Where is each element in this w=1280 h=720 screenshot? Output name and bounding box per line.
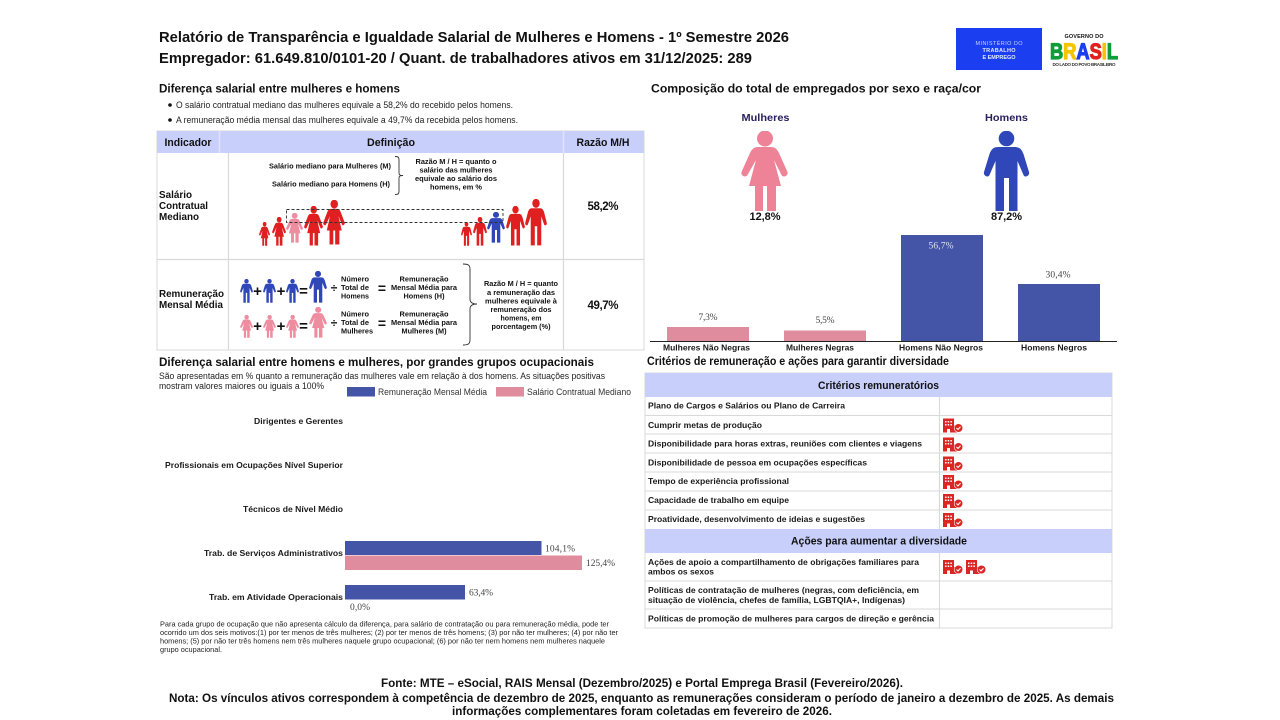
- logo: Ministério do Trabalho e Emprego: [956, 28, 1042, 70]
- median salary definition: [269, 156, 497, 194]
- occupational chart description: mostram valores maiores ou iguais a 100%: [159, 381, 324, 391]
- action rows: Políticas de contratação de mulheres (negras, com deficiência, em: [648, 585, 919, 595]
- logo: Ministério do Trabalho e Emprego: TRABALHO: [982, 48, 1016, 54]
- criteria rows: Disponibilidade de pessoa em ocupações específicas: [648, 458, 867, 468]
- panel: indicator table: [157, 131, 644, 350]
- bar chart: sex and race: [650, 235, 1117, 352]
- bar chart: occupational groups: 63,4%: [469, 588, 493, 598]
- row label: salário contratual mediano: Salário: [159, 189, 192, 201]
- logo: Governo do Brasil: BRASIL: [1050, 39, 1118, 64]
- formula: women average pay: [240, 307, 457, 338]
- bar chart: occupational groups: 0,0%: [350, 603, 370, 613]
- formula: men average pay: Homens: [341, 294, 369, 300]
- ratio value: 49,7%: 49,7%: [588, 300, 618, 312]
- average pay definition: mulheres equivale à: [485, 298, 557, 306]
- occupational chart description: São apresentadas em % quanto a remuneração das mulheres vale em relação à dos homens. As situações positivas: [159, 371, 605, 381]
- formula: men average pay: Homens (H): [404, 294, 444, 300]
- bar chart: occupational groups: Técnicos de Nível Médio: [243, 504, 343, 514]
- bullet statements: O salário contratual mediano das mulheres equivale a 58,2% do recebido pelos homens.: [176, 100, 513, 110]
- bar chart: sex and race: Mulheres Não Negras: [663, 342, 750, 352]
- formula: men average pay: Número: [341, 276, 369, 284]
- legend: [347, 387, 631, 398]
- logo: Ministério do Trabalho e Emprego: E EMPREGO: [982, 55, 1016, 61]
- section header: actions: Ações para aumentar a diversidade: [791, 536, 967, 548]
- row label: remuneração mensal média: Mensal Média: [159, 299, 223, 311]
- source and note: Fonte: MTE – eSocial, RAIS Mensal (Dezembro/2025) e Portal Emprega Brasil (Fevereiro/2026).: [381, 678, 903, 690]
- row label: remuneração mensal média: Remuneração: [159, 288, 224, 300]
- report title: Relatório de Transparência e Igualdade Salarial de Mulheres e Homens - 1º Semestre 2026: [159, 30, 789, 46]
- legend: Remuneração Mensal Média: [378, 387, 488, 398]
- bar chart: occupational groups: [165, 416, 615, 613]
- action rows: situação de violência, chefes de família, LGBTQIA+, Indígenas): [648, 595, 905, 605]
- heading: criteria and actions: Critérios de remuneração e ações para garantir diversidade: [647, 354, 949, 368]
- bar chart: sex and race: Homens Negros: [1021, 342, 1087, 352]
- average pay definition: remuneração dos: [490, 307, 552, 314]
- panel: criteria table: [645, 373, 1112, 628]
- section header: criteria: [645, 373, 1112, 397]
- ratio value: 58,2%: 58,2%: [588, 201, 618, 213]
- formula: men average pay: =: [299, 283, 308, 300]
- heading: occupational groups: Diferença salarial entre homens e mulheres, por grandes grupos ocupacionais: [159, 355, 594, 369]
- median salary definition: equivale ao salário dos: [415, 176, 497, 183]
- bar chart: sex and race: 5,5%: [816, 316, 835, 326]
- heading: wage gap: Diferença salarial entre mulheres e homens: [159, 82, 400, 96]
- formula: women average pay: Mulheres: [341, 328, 373, 336]
- bullet statements: [168, 100, 518, 125]
- table header: Indicador: [164, 137, 212, 149]
- formula: men average pay: =: [378, 280, 386, 296]
- median salary definition: Razão M / H = quanto o: [416, 159, 496, 166]
- criteria rows: Tempo de experiência profissional: [648, 476, 789, 486]
- median salary definition: Salário mediano para Mulheres (M): [269, 164, 391, 170]
- average pay definition: porcentagem (%): [492, 324, 550, 331]
- median salary definition: Salário mediano para Homens (H): [272, 182, 390, 188]
- formula: women average pay: +: [253, 318, 262, 335]
- formula: women average pay: ÷: [331, 316, 338, 330]
- criteria rows: Proatividade, desenvolvimento de ideias e sugestões: [648, 514, 865, 524]
- average pay definition: [463, 264, 558, 345]
- icons: women ordered by salary: [259, 200, 345, 246]
- footnote: missing data reasons: grupo ocupacional.: [160, 645, 222, 654]
- table header: Definição: [367, 137, 415, 149]
- report title: Empregador: 61.649.810/0101-20 / Quant. de trabalhadores ativos em 31/12/2025: 289: [159, 51, 752, 67]
- formula: men average pay: Total de: [341, 285, 369, 292]
- formula: men average pay: Remuneração: [400, 276, 448, 284]
- formula: men average pay: [240, 271, 457, 303]
- criteria rows: Cumprir metas de produção: [648, 420, 762, 430]
- table header: Razão M/H: [576, 137, 630, 149]
- report title: [159, 30, 789, 67]
- median salary definition: homens, em %: [430, 184, 483, 192]
- bar chart: occupational groups: Profissionais em Ocupações Nível Superior: [165, 460, 344, 470]
- footnote: missing data reasons: Para cada grupo de ocupação que não apresenta cálculo da diferença, para salário de contratação ou para remuneração média, pode ter: [160, 620, 609, 628]
- bullet statements: A remuneração média mensal das mulheres equivale a 49,7% da recebida pelos homens.: [176, 115, 518, 125]
- footnote: missing data reasons: [160, 620, 618, 654]
- source and note: [169, 678, 1114, 718]
- row label: salário contratual mediano: [159, 189, 208, 223]
- formula: women average pay: =: [378, 315, 386, 331]
- pictogram: women share: Mulheres: [742, 112, 790, 124]
- heading: workforce composition: Composição do total de empregados por sexo e raça/cor: [651, 82, 981, 96]
- section header: actions: [645, 529, 1112, 553]
- pictogram: women share: 12,8%: [750, 211, 781, 223]
- action rows: Ações de apoio a compartilhamento de obrigações familiares para: [648, 557, 919, 567]
- logo: Governo do Brasil: GOVERNO DO: [1064, 34, 1104, 40]
- formula: women average pay: Mulheres (M): [402, 328, 446, 336]
- pictogram: men share: 87,2%: [991, 211, 1022, 223]
- bar chart: sex and race: 56,7%: [928, 242, 954, 252]
- pictogram: men share: [984, 112, 1029, 223]
- footnote: missing data reasons: homens; (5) por não ter três homens nem três mulheres naquele grupo ocupacional; (6) por não ter nem homens nem mulheres naquele: [160, 636, 605, 646]
- action rows: Políticas de promoção de mulheres para cargos de direção e gerência: [648, 614, 934, 624]
- bar chart: sex and race: Mulheres Negras: [786, 342, 854, 352]
- formula: women average pay: +: [277, 318, 286, 335]
- bar chart: sex and race: 30,4%: [1046, 270, 1071, 280]
- formula: women average pay: Remuneração: [400, 312, 448, 318]
- occupational chart description: [159, 371, 605, 391]
- pictogram: men share: Homens: [985, 112, 1028, 124]
- icons: men ordered by salary: [461, 199, 547, 246]
- icons: criteria adopted: [943, 418, 963, 527]
- dashed median link: [286, 210, 503, 222]
- section header: criteria: Critérios remuneratórios: [818, 380, 939, 392]
- legend: Salário Contratual Mediano: [527, 387, 631, 398]
- source and note: informações complementares foram coletadas em fevereiro de 2026.: [452, 706, 832, 718]
- formula: men average pay: ÷: [331, 281, 338, 295]
- formula: men average pay: +: [253, 283, 262, 300]
- bar chart: occupational groups: 125,4%: [586, 559, 615, 569]
- bar chart: occupational groups: 104,1%: [545, 544, 575, 554]
- logo: Governo do Brasil: DO LADO DO POVO BRASILEIRO: [1052, 62, 1116, 67]
- row label: salário contratual mediano: Mediano: [159, 211, 199, 223]
- formula: men average pay: +: [277, 283, 286, 300]
- bar chart: occupational groups: Dirigentes e Gerentes: [254, 416, 343, 426]
- average pay definition: Razão M / H = quanto: [484, 281, 558, 288]
- average pay definition: homens, em: [500, 316, 542, 322]
- criteria rows: Disponibilidade para horas extras, reuniões com clientes e viagens: [648, 438, 922, 448]
- formula: women average pay: Total de: [341, 320, 369, 327]
- average pay definition: a remuneração das: [487, 290, 555, 297]
- bar chart: sex and race: 7,3%: [698, 313, 718, 323]
- icons: actions adopted: [943, 560, 986, 574]
- bar chart: occupational groups: Trab. em Atividade Operacionais: [209, 592, 343, 602]
- footnote: missing data reasons: ocorrido um dos seis motivos:(1) por ter menos de três mulheres; (2) por ter menos de três homens; (3) por não ter mulheres; (4) por não ter: [160, 628, 618, 637]
- formula: men average pay: Mensal Média para: [391, 285, 457, 292]
- formula: women average pay: Mensal Média para: [391, 320, 457, 327]
- logo: Ministério do Trabalho e Emprego: MINISTÉRIO DO: [976, 40, 1023, 47]
- table header: [164, 137, 630, 149]
- row label: remuneração mensal média: [159, 288, 224, 311]
- bar chart: occupational groups: Trab. de Serviços Administrativos: [204, 548, 343, 558]
- source and note: Nota: Os vínculos ativos correspondem à competência de dezembro de 2025, enquanto as remunerações consideram o período de janeiro a dezembro de 2025. As demais: [169, 693, 1114, 705]
- criteria rows: Plano de Cargos e Salários ou Plano de Carreira: [648, 400, 845, 410]
- formula: women average pay: Número: [341, 312, 369, 318]
- median salary definition: salário das mulheres: [420, 168, 493, 174]
- bar chart: sex and race: Homens Não Negros: [899, 342, 983, 352]
- criteria rows: Capacidade de trabalho em equipe: [648, 495, 789, 505]
- action rows: ambos os sexos: [648, 566, 714, 576]
- pictogram: women share: [741, 112, 790, 223]
- action rows: [648, 557, 934, 624]
- formula: women average pay: =: [299, 318, 308, 335]
- criteria rows: [648, 400, 922, 524]
- row label: salário contratual mediano: Contratual: [159, 200, 208, 212]
